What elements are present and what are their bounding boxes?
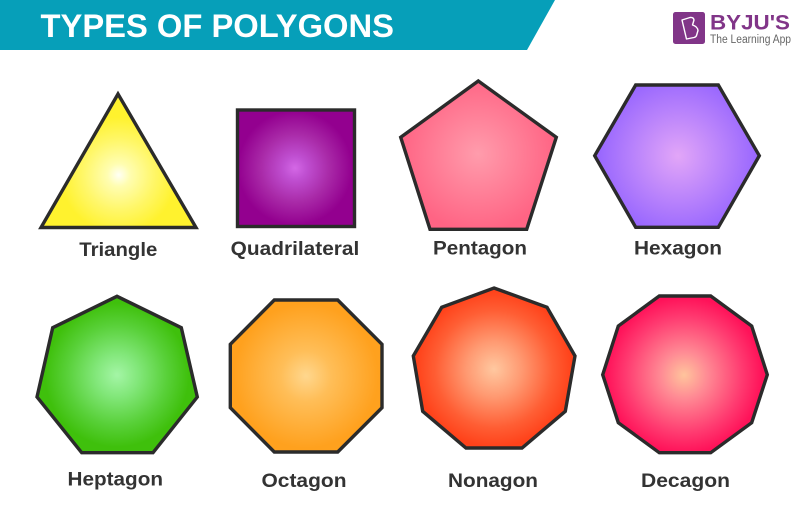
heptagon xyxy=(37,296,197,490)
label: octagon: Octagon xyxy=(262,470,346,492)
logo: BYJU'S: BYJU'S xyxy=(710,12,790,34)
pentagon xyxy=(401,81,556,260)
quadrilateral xyxy=(231,110,359,260)
label: hexagon: Hexagon xyxy=(634,238,722,260)
octagon xyxy=(230,300,382,492)
logo: BYJU'S xyxy=(673,12,791,46)
label: nonagon: Nonagon xyxy=(448,470,538,492)
nonagon xyxy=(413,288,575,492)
header banner xyxy=(0,0,555,50)
label: pentagon: Pentagon xyxy=(433,238,527,260)
triangle xyxy=(41,94,196,261)
title: TYPES OF POLYGONS xyxy=(40,8,394,44)
label: heptagon: Heptagon xyxy=(68,468,163,490)
hexagon xyxy=(595,85,759,260)
decagon xyxy=(603,296,767,492)
label: decagon: Decagon xyxy=(641,470,730,492)
label: triangle: Triangle xyxy=(79,239,157,261)
logo: BYJU'S: The Learning App xyxy=(710,34,791,46)
label: quadrilateral: Quadrilateral xyxy=(231,238,359,260)
